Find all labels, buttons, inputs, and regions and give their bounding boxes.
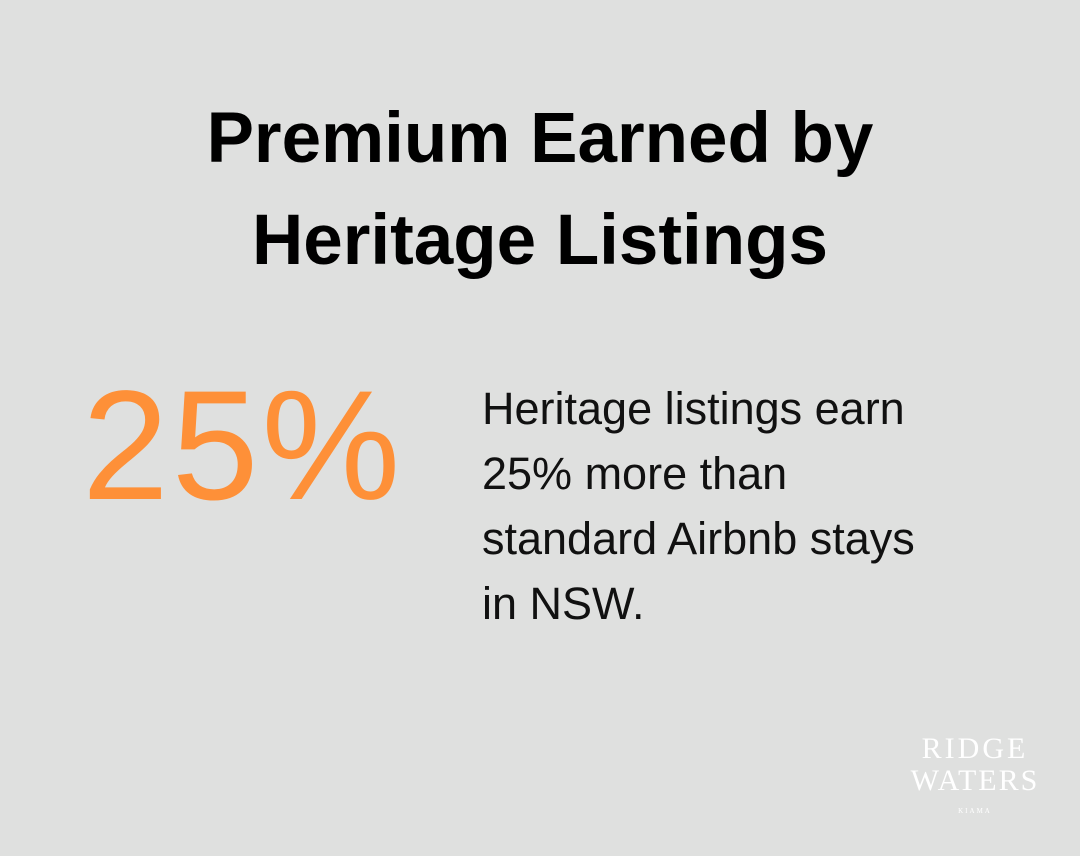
description text bbox=[482, 383, 915, 629]
description text: Heritage listings earn bbox=[482, 383, 905, 434]
logo: RIDGE bbox=[922, 732, 1028, 765]
description text: standard Airbnb stays bbox=[482, 513, 915, 564]
description text: in NSW. bbox=[482, 578, 645, 629]
logo: KIAMA bbox=[958, 807, 992, 815]
logo bbox=[910, 732, 1039, 815]
title: Heritage Listings bbox=[252, 201, 828, 280]
description text: 25% more than bbox=[482, 448, 787, 499]
logo: WATERS bbox=[911, 764, 1039, 797]
title bbox=[207, 99, 873, 280]
big stat number: 25% bbox=[82, 359, 403, 533]
title: Premium Earned by bbox=[207, 99, 873, 178]
